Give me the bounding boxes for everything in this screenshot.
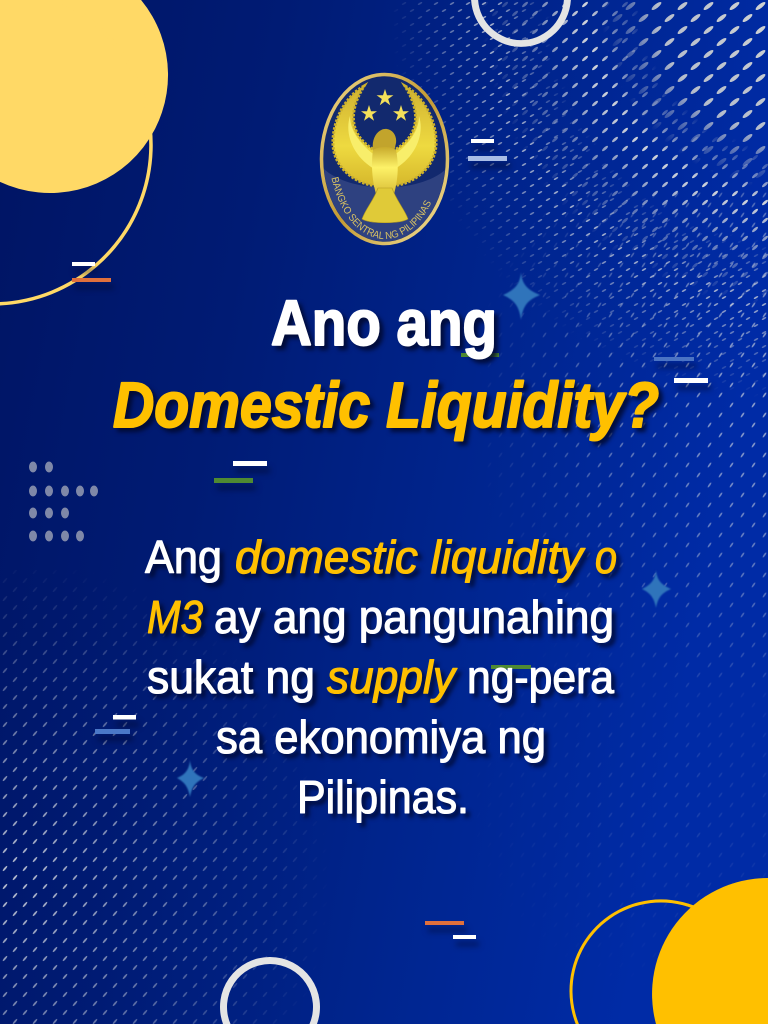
body line 3: sukat ng [147,651,315,703]
dashes: beside logo [468,139,507,161]
title [113,287,659,441]
circle: bottom right amber outline [570,899,752,1024]
ring: bottom white [220,957,320,1024]
dashes: bottom [425,921,476,939]
body line 1: domestic liquidity [235,531,586,583]
icon: sparkle star lower left [177,760,204,797]
body line 5: Pilipinas. [297,771,469,823]
eagle inner wing highlights [348,116,421,170]
dash: green under title [461,353,499,357]
body line 4: sa ekonomiya ng [216,711,546,763]
circle: top left filled yellow [0,0,168,193]
body line 2: M3 [147,591,203,643]
dashes: right of title [654,357,708,383]
dashes: top left [72,262,111,282]
body line 1: Ang [145,531,222,583]
dot pattern: top right halftone [396,2,768,390]
eagle right wing [391,86,436,186]
eagle left wing [333,86,378,186]
dot pattern: bottom right faint [512,654,766,937]
dot pattern: right middle halftone [480,190,768,690]
logo lower band [324,169,445,242]
body line 3: ng-pera [467,651,614,703]
eagle tail [362,188,408,223]
body line 2: ay ang pangunahing [214,591,614,643]
title line 1: Ano ang [271,287,497,359]
dashes: below title [214,461,267,483]
logo: Bangko Sentral ng Pilipinas seal [320,72,450,246]
body line 1: o [595,531,617,583]
title line 2: Domestic Liquidity? [113,369,659,441]
dot pattern: bottom left halftone [0,570,330,1024]
body text [145,531,617,823]
dashes: left of body text [95,715,136,734]
circle: bottom right filled amber [652,878,768,1024]
stars [361,89,409,121]
eagle head [373,129,396,152]
logo ring [322,74,448,244]
circle: top left yellow outline [0,0,153,306]
icon: sparkle star right [642,570,671,608]
logo text: BANGKO SENTRAL NG PILIPINAS [332,176,430,240]
body line 3: supply [327,651,458,703]
dash: green behind body text [491,665,531,669]
eagle body [372,147,398,198]
dot grid: gray dots [29,462,98,542]
body line 3 [147,651,614,703]
ring: top white [471,0,571,47]
icon: sparkle star upper [503,272,540,320]
